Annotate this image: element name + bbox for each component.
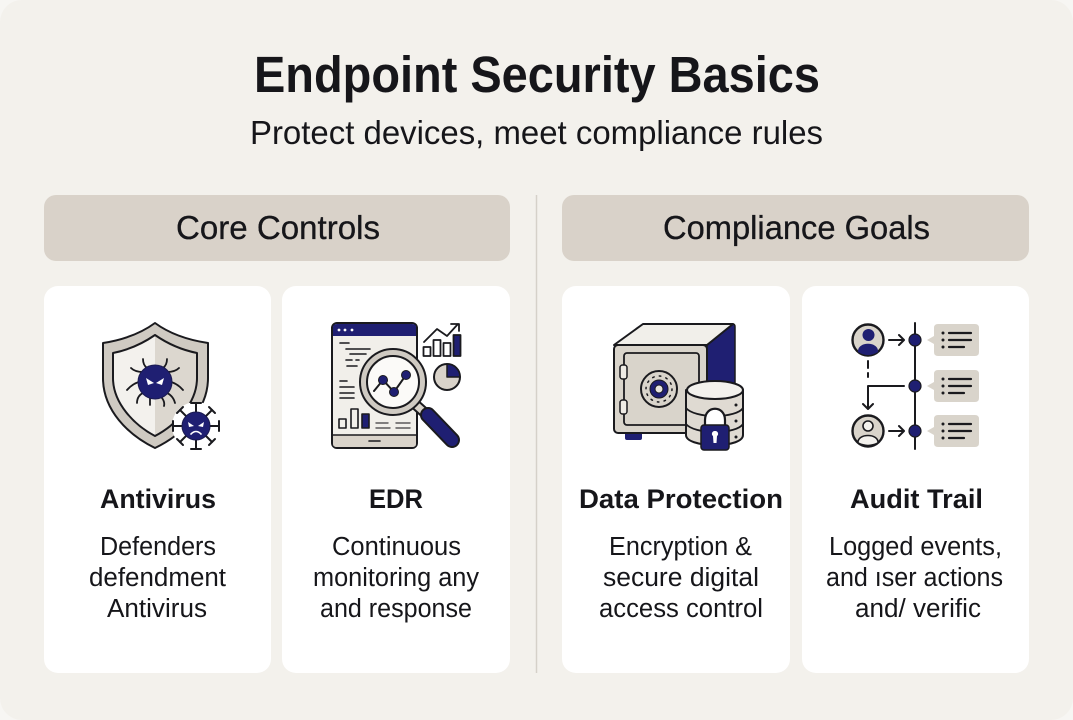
icon: dashboard with magnifier: [332, 323, 460, 448]
card text: edr: [313, 533, 479, 623]
card text: audit trail: [826, 533, 1003, 623]
icon: safe and database: [614, 324, 743, 450]
heading: core controls: [44, 195, 510, 261]
card text: data protection: secure digital: [603, 564, 759, 592]
card text: audit trail: and ıser actions: [826, 564, 1003, 592]
heading: compliance goals: Compliance Goals: [663, 209, 930, 246]
heading: compliance goals: [562, 195, 1029, 261]
card text: antivirus: Antivirus: [107, 595, 207, 623]
icon: audit timeline: [852, 323, 979, 449]
card title: data protection: Data Protection: [579, 484, 783, 514]
heading: core controls: Core Controls: [176, 209, 380, 246]
card title: edr: EDR: [369, 484, 423, 514]
card title: audit trail: Audit Trail: [850, 484, 983, 514]
title: Endpoint Security Basics: [254, 46, 820, 103]
card text: antivirus: defendment: [89, 564, 226, 592]
card text: data protection: access control: [599, 595, 763, 623]
card text: antivirus: [89, 533, 226, 623]
panel: data protection: [562, 286, 790, 673]
panel: antivirus: [44, 286, 271, 673]
card text: data protection: [599, 533, 763, 623]
card title: antivirus: Antivirus: [100, 484, 216, 514]
subtitle: Protect devices, meet compliance rules: [250, 114, 823, 151]
panel: audit trail: [802, 286, 1029, 673]
card text: edr: and response: [320, 595, 472, 623]
card text: edr: Continuous: [332, 533, 461, 561]
card text: antivirus: Defenders: [100, 533, 216, 561]
card text: data protection: Encryption &: [609, 533, 752, 561]
card text: audit trail: and/ verific: [855, 595, 981, 623]
panel: edr: [282, 286, 510, 673]
icon: shield with viruses: [103, 323, 220, 450]
card text: audit trail: Logged events,: [829, 533, 1002, 561]
card text: edr: monitoring any: [313, 564, 479, 592]
